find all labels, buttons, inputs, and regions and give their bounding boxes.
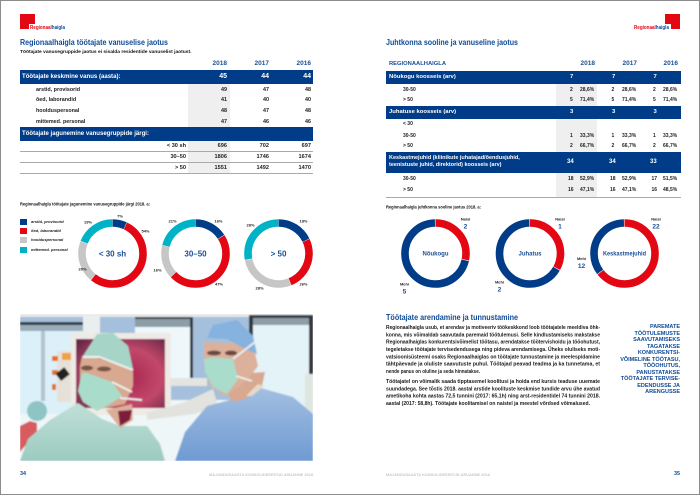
row: 1: [653, 132, 656, 138]
band: Juhatus: 3: [654, 108, 657, 114]
band: Keskastmejuhid: Keskastmejuhid (kliinikute juhatajad/õendusjuhid,: [389, 155, 520, 161]
donut: Keskastmejuhid: 22: [652, 224, 660, 230]
footer: left page number: 34: [20, 471, 26, 477]
row: 5: [653, 97, 656, 103]
row: 71,4%: [580, 97, 594, 103]
band: age groups: [20, 127, 313, 141]
row: 30-50: [403, 87, 416, 93]
row: [403, 176, 678, 182]
table: management: 2018: [581, 60, 595, 67]
donut: 30-50: 47%: [215, 282, 223, 286]
row: over 50: [175, 165, 311, 171]
row: 47,1%: [622, 186, 636, 192]
donut: under 30: 19%: [84, 220, 92, 224]
band: Keskastmejuhid: teenistuste juhid, direktorid) koosseis (arv): [389, 162, 501, 168]
callout: pull quote: TÖÖTULEMUSTE: [634, 330, 680, 336]
footer: right page number: 35: [674, 471, 680, 477]
row: 16: [610, 186, 616, 192]
donut: Juhatus: Mehi: [495, 280, 504, 284]
row: arstid: 49: [221, 87, 227, 93]
row: 71,4%: [663, 97, 677, 103]
footer: right running title: MAJANDUSAASTA KONSOLIDEERITUD ARUANNE 2018: [386, 472, 490, 477]
donut: over 50: 28%: [246, 222, 255, 228]
table: management: 2016: [664, 60, 678, 67]
row: arstid: arstid, provisorid: [36, 87, 80, 93]
row: hooldus: 48: [221, 108, 227, 114]
row: 2: [612, 87, 614, 93]
text: development body: nende panus on oluline ja seda hinnatakse.: [386, 369, 480, 375]
legend: arstid: arstid, provisorid: [31, 219, 64, 224]
band: Juhatus: 3: [612, 108, 615, 114]
row: 52,9%: [622, 176, 636, 182]
text: development body: ametikoha kohta aastas 72,5 tunnini (2017: 65,1h) ning arst-residentidel 74 tunnini 2018.: [386, 394, 601, 400]
row: [403, 97, 678, 103]
band: Noukogu: 7: [654, 74, 657, 80]
row: oed: 41: [221, 97, 227, 103]
callout: pull quote: [620, 324, 680, 395]
row: 30-50: 1806: [215, 154, 227, 160]
legend: hooldus: hoolduspersonal: [31, 237, 63, 242]
text: development body: Töötajatel on võimalik saada tipptasemel koolitusi ja hoida end kursis teaduse uuemate: [386, 379, 600, 385]
donut: Keskastmejuhid: [577, 216, 661, 284]
donut: under 30: 54%: [141, 228, 150, 234]
row: over 50: > 50: [175, 165, 186, 171]
callout: pull quote: ARENGUSSE: [645, 389, 680, 395]
donut: Juhatus: 2: [498, 286, 502, 294]
band: average age: Töötajate keskmine vanus (aasta):: [22, 74, 120, 80]
row: hooldus: 48: [305, 108, 311, 114]
row: under 30: < 30 sh: [167, 143, 186, 149]
equipment: [57, 351, 72, 402]
row: under 30: [167, 143, 311, 149]
row: 2: [612, 143, 614, 149]
windows: [20, 322, 83, 414]
table: employee age: 2016: [297, 60, 311, 67]
background person: [27, 401, 47, 421]
row: hooldus: hoolduspersonal: [36, 108, 79, 114]
donut: under 30: < 30 sh: [99, 250, 126, 258]
donut: over 50: > 50: [271, 250, 287, 258]
left surgeon head: [80, 356, 133, 409]
row: 2: [653, 87, 656, 93]
callout: pull quote: PANUSTATAKSE: [636, 370, 680, 376]
row: arstid: 48: [305, 87, 311, 93]
donut: 30-50: 21%: [168, 218, 177, 224]
band: Keskastmejuhid: 34: [609, 158, 616, 164]
callout: pull quote: TÖÖOHUTUS,: [643, 363, 680, 369]
year headers: 2018: [213, 60, 227, 67]
donut: Juhatus: Naisi: [555, 216, 565, 222]
text: development body: aastal (2017: 58,8h). Töötajate koolitamisel on naistel ja meestel võrdsed võimalused.: [386, 401, 590, 407]
donut: 30-50: 16%: [153, 268, 162, 272]
row: under 30: 697: [302, 143, 311, 149]
legend: arstid: [20, 219, 64, 225]
row: > 50: [403, 143, 413, 149]
row: over 50: 1492: [257, 165, 269, 171]
callout: pull quote: PAREMATE: [650, 324, 680, 330]
donut: over 50: 26%: [299, 282, 308, 286]
band: average age: 44: [303, 73, 311, 80]
row: 30-50: 1674: [299, 154, 311, 160]
row: > 50: [403, 186, 413, 192]
row: mittemed: 46: [305, 119, 311, 125]
row: 66,7%: [663, 143, 677, 149]
row: 5: [570, 97, 573, 103]
table: management: 2017: [623, 60, 637, 67]
text: intro note: Töötajate vanusegruppide jaotus ei sisalda residentide vanuselist jaotust.: [20, 50, 192, 55]
legend: mittemed: mittemed. personal: [31, 247, 68, 252]
row: mittemed: 47: [221, 119, 227, 125]
right surgeon head: [204, 342, 258, 396]
row: 71,4%: [622, 97, 636, 103]
row: hooldus: 47: [263, 108, 269, 114]
row: arstid: 47: [263, 87, 269, 93]
row: 28,6%: [663, 87, 677, 93]
row: 18: [610, 176, 616, 182]
row: > 50: [403, 97, 413, 103]
row: 66,7%: [580, 143, 594, 149]
row: 33,3%: [622, 132, 636, 138]
callout: pull quote: EDENDUSSE JA: [637, 382, 680, 388]
row: [403, 132, 678, 138]
band: age groups: Töötajate jagunemine vanusegruppide järgi:: [22, 131, 149, 137]
row: 51,5%: [663, 176, 677, 182]
band: Juhatus: [386, 106, 681, 118]
donut: Noukogu: Mehi: [400, 282, 409, 286]
row: 52,9%: [580, 176, 594, 182]
row: < 30: [403, 121, 413, 127]
row: oed: 40: [305, 97, 311, 103]
row: 66,7%: [622, 143, 636, 149]
donut: 30-50: 30–50: [184, 250, 207, 258]
row: arstid: [36, 87, 311, 93]
band: Noukogu: [386, 70, 681, 84]
donut: over 50: 28%: [255, 286, 264, 290]
row: 30-50: 1746: [257, 154, 269, 160]
donut: Keskastmejuhid: Mehi: [577, 256, 586, 261]
row: 30-50: 30–50: [170, 154, 186, 160]
band: Keskastmejuhid: [386, 152, 681, 173]
band: Keskastmejuhid: 33: [650, 158, 657, 164]
legend: oed: [20, 228, 61, 234]
row: mittemed: 46: [263, 119, 269, 125]
row: 28,6%: [580, 87, 594, 93]
legend: [20, 219, 68, 253]
row: [403, 186, 678, 192]
row: 30-50: [403, 132, 416, 138]
row: oed: 40: [263, 97, 269, 103]
row: 48,5%: [663, 186, 677, 192]
donut: Keskastmejuhid: Keskastmejuhid: [603, 252, 646, 258]
row: 2: [653, 143, 656, 149]
donut: 30-50: 16%: [214, 218, 223, 224]
donut: Juhatus: Juhatus: [518, 252, 542, 258]
footer: left running title: MAJANDUSAASTA KONSOLIDEERITUD ARUANNE 2018: [209, 472, 313, 477]
table: employee age: [20, 60, 313, 174]
band: Keskastmejuhid: 34: [567, 158, 574, 164]
row: 2: [570, 143, 573, 149]
logo: left page: Regionaalhaigla: [30, 25, 66, 31]
table headers: REGIONAALHAIGLA: [389, 61, 446, 67]
logo: right page: Regionaalhaigla: [634, 25, 670, 31]
band: Noukogu: 7: [570, 74, 573, 80]
row: over 50: 1470: [299, 165, 311, 171]
row: 33,3%: [663, 132, 677, 138]
donut: Noukogu: Naisi: [461, 216, 470, 222]
donut: 30-50: [153, 218, 226, 286]
row: 1: [612, 132, 614, 138]
row: mittemed: [36, 119, 311, 125]
band: Noukogu: 7: [612, 74, 615, 80]
donut: Keskastmejuhid: 12: [578, 263, 585, 270]
donut: Keskastmejuhid: Naisi: [651, 216, 661, 222]
callout: pull quote: SAAVUTAMISEKS: [633, 337, 680, 343]
callout: pull quote: TÖÖTAJATE TERVISE-: [621, 376, 680, 382]
row: 28,6%: [622, 87, 636, 93]
row: 17: [652, 176, 657, 182]
right surgeon body: [175, 387, 313, 461]
row: 33,3%: [580, 132, 594, 138]
logo: left page: [20, 14, 66, 31]
row: [403, 87, 678, 93]
row: 5: [612, 97, 614, 103]
row: oed: [36, 97, 311, 103]
legend: mittemed: [20, 247, 68, 253]
donut: over 50: [246, 218, 309, 290]
legend: hooldus: [20, 237, 64, 243]
row: under 30: 696: [218, 143, 227, 149]
callout: pull quote: VÕIMELINE TÖÖTASU,: [620, 356, 680, 362]
text: development body: tähtpäevade ja oluliste saavutuste puhul. Töötajad peavad teadma ja ka tunnetama, et: [386, 362, 600, 368]
donut: Juhatus: [495, 216, 565, 294]
row: 30-50: [403, 176, 416, 182]
callout: pull quote: TAGATAKSE: [647, 344, 680, 350]
donut: Noukogu: 5: [403, 288, 407, 296]
row: hooldus: [36, 108, 311, 114]
photo: surgeons: [20, 314, 313, 461]
text: development body: [386, 325, 601, 407]
band: Juhatus: 3: [570, 108, 573, 114]
donut: under 30: 7%: [117, 214, 123, 218]
band: average age: 45: [219, 73, 227, 80]
callout: pull quote: KONKURENTSI-: [638, 350, 680, 356]
donut: Noukogu: [400, 216, 470, 296]
highlighted 2018 column: [556, 84, 597, 197]
highlighted 2018 column: [188, 84, 230, 174]
donut: Juhatus: 1: [558, 224, 562, 230]
band: average age: 44: [261, 73, 269, 80]
row: 1: [570, 132, 573, 138]
row: 47,1%: [580, 186, 594, 192]
row: over 50: 1551: [215, 165, 227, 171]
logo: right page: [634, 14, 680, 31]
table: management: [386, 60, 681, 198]
left surgeon body: [20, 403, 165, 461]
donut: Noukogu: 2: [464, 224, 468, 230]
donut: Noukogu: Nõukogu: [422, 252, 449, 258]
monitor: [71, 333, 171, 415]
row: 16: [652, 186, 657, 192]
donut: over 50: 18%: [299, 218, 308, 224]
donut: under 30: 20%: [78, 266, 87, 272]
row: [403, 143, 678, 149]
table: employee age: 2017: [255, 60, 269, 67]
band: Noukogu: Nõukogu koosseis (arv): [389, 74, 456, 80]
row: 18: [568, 176, 574, 182]
row: 30-50: [170, 154, 311, 160]
row: under 30: 702: [260, 143, 269, 149]
band: Juhatus: Juhatuse koosseis (arv): [389, 108, 456, 114]
band: average age: [20, 70, 313, 84]
donut: under 30: [78, 214, 150, 284]
row: 2: [570, 87, 573, 93]
legend: oed: õed, laborandid: [31, 228, 61, 233]
row: 16: [568, 186, 574, 192]
row: mittemed: mittemed. personal: [36, 119, 85, 125]
row: oed: õed, laborandid: [36, 97, 76, 103]
